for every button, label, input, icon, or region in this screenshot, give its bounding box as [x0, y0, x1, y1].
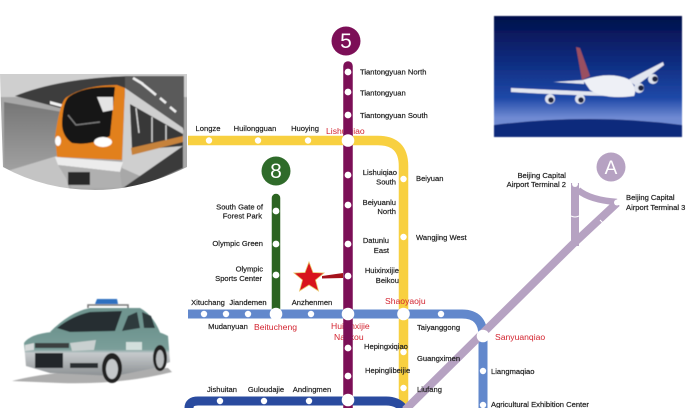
- station labels: Jishuitan: [207, 385, 237, 394]
- station labels: Airport Terminal 2: [507, 180, 566, 189]
- photo: subway train: [0, 72, 190, 192]
- location star marker: [294, 262, 343, 291]
- line 5 magenta: [343, 66, 353, 408]
- station labels: Guloudajie: [248, 385, 284, 394]
- station labels: Airport Terminal 3: [626, 203, 685, 212]
- station labels: Datunlu: [363, 236, 389, 245]
- interchange labels under the lines: Lishuiqiao: [326, 126, 365, 136]
- station labels: Liangmaqiao: [491, 367, 534, 376]
- badge: line 5: [332, 26, 360, 56]
- station labels: Olympic Green: [212, 239, 263, 248]
- line 8 green: [272, 198, 280, 312]
- station labels: Beijing Capital: [517, 171, 566, 180]
- station labels: Beiyuanlu: [363, 198, 396, 207]
- station labels: Mudanyuan: [208, 322, 248, 331]
- station labels: Tiantongyuan South: [360, 111, 428, 120]
- station labels: Tiantongyuan North: [360, 68, 426, 76]
- station labels: Tiantongyuan: [360, 88, 406, 98]
- station labels: Anzhenmen: [292, 298, 332, 307]
- station labels: Forest Park: [223, 212, 262, 220]
- station labels: Huoying: [291, 124, 319, 133]
- airport express line: [405, 183, 617, 408]
- station labels: Lishuiqiao: [363, 168, 397, 177]
- badge: airport line A: [596, 152, 626, 182]
- interchange labels under the lines: Nankou: [334, 332, 364, 342]
- badge: line 8: [262, 156, 290, 186]
- station labels: [191, 68, 685, 408]
- interchange labels under the lines: Huixinxijie: [331, 321, 370, 331]
- badge: line 8: 8: [270, 160, 282, 183]
- interchange labels under the lines: [254, 126, 545, 342]
- station labels: Longze: [196, 124, 220, 133]
- station labels: South Gate of: [216, 202, 264, 212]
- photo: taxi: [12, 299, 172, 383]
- station labels: Olympic: [236, 264, 263, 274]
- station labels: Huilongguan: [234, 124, 276, 133]
- station labels: Jiandemen: [229, 298, 267, 307]
- interchange labels under the lines: Sanyuanqiao: [495, 332, 545, 342]
- station labels: Hepinglibeijie: [365, 366, 410, 375]
- badge: line 5: 5: [340, 30, 352, 53]
- line 1 yellow: [188, 140, 404, 408]
- station labels: Hepingxiqiao: [364, 342, 408, 351]
- station dots: [201, 69, 620, 408]
- station labels: Andingmen: [293, 385, 331, 394]
- station labels: Huixinxijie: [365, 266, 399, 275]
- station labels: Guangximen: [417, 354, 460, 363]
- station labels: South: [376, 178, 396, 186]
- photo: airplane over horizon: [494, 16, 682, 137]
- station labels: Sports Center: [215, 274, 262, 283]
- line 13 blue: [188, 314, 483, 408]
- badge: airport line A: A: [605, 158, 618, 179]
- interchange label: Shaoyaoju: Shaoyaoju: [385, 296, 426, 306]
- station labels: Wangjing West: [416, 233, 468, 242]
- interchange labels under the lines: Beitucheng: [254, 322, 297, 332]
- station labels: Beijing Capital: [626, 193, 675, 202]
- station labels: Taiyanggong: [417, 323, 460, 332]
- station labels: North: [377, 207, 396, 216]
- line 2 dark blue: [189, 401, 403, 408]
- station labels: Beiyuan: [416, 174, 443, 183]
- station labels: Xituchang: [191, 298, 225, 307]
- station labels: Liufang: [417, 385, 442, 394]
- station labels: Beikou: [376, 276, 399, 285]
- station labels: East: [374, 246, 390, 255]
